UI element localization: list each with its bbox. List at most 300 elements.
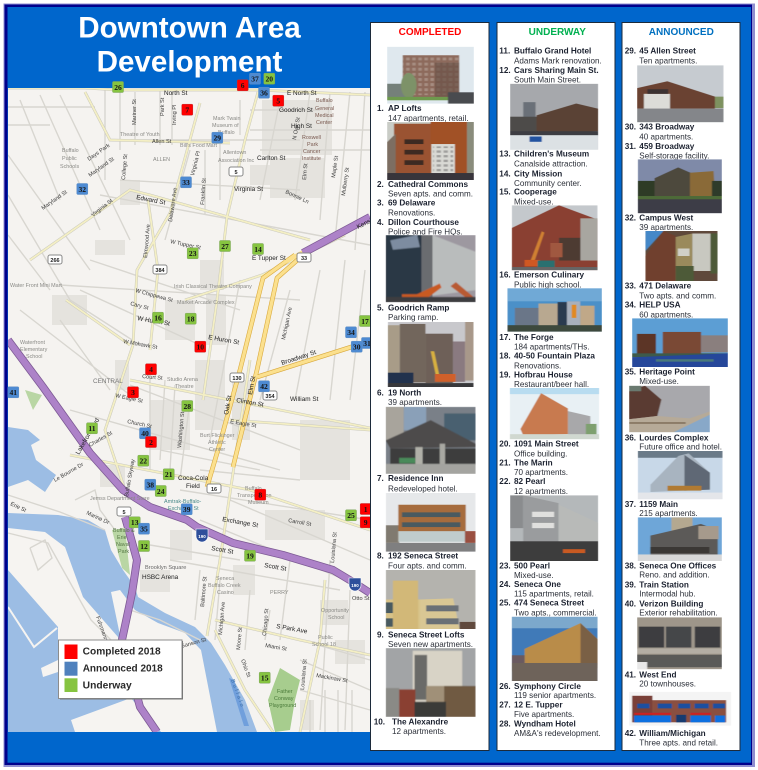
item 18: 18. [499, 352, 511, 361]
item 2 [377, 180, 473, 198]
map: street labels: Charles St [88, 430, 114, 449]
item 20: 20. [499, 440, 511, 449]
map: street labels: Cary St [129, 301, 149, 312]
photo: Heritage Point [632, 318, 728, 367]
item 30 [625, 123, 695, 142]
map: street labels: Virginia St [91, 198, 115, 219]
map: street labels: Kensington [356, 210, 388, 231]
map: street labels: Delaware Ave [168, 187, 179, 222]
map: street labels: Elementary [20, 347, 48, 353]
map: street labels: Naval [116, 542, 130, 548]
item 15 [499, 188, 557, 207]
marker group: underway [86, 73, 370, 683]
marker numbers: 18 [187, 314, 195, 324]
map: street labels: Otto St [352, 596, 370, 602]
marker numbers: 21 [165, 470, 173, 479]
item 5: Parking ramp. [388, 313, 438, 322]
item 21 [499, 458, 568, 477]
marker numbers: 8 [258, 490, 262, 500]
item 35: 35. [625, 367, 636, 376]
map: street labels: Allen St [152, 139, 172, 145]
map: street labels: CENTRAL [93, 378, 123, 385]
item 20 [499, 440, 579, 458]
photo: 19 North [388, 322, 474, 387]
item 16 [499, 270, 585, 289]
item 18: Renovations. [514, 361, 561, 370]
item 36 [625, 433, 722, 452]
item 10 [374, 717, 449, 736]
item 9: Seven new apartments. [388, 640, 473, 649]
map: street labels: Erie St [9, 501, 27, 514]
map: street labels: General [315, 106, 334, 112]
item 21: 21. [499, 458, 511, 467]
item 8 [377, 552, 467, 570]
map: street labels: Center [209, 447, 225, 453]
map: street labels: Buffalo [316, 98, 333, 104]
item 16: Public high school. [514, 280, 582, 289]
map: street labels: Park St [160, 97, 166, 116]
marker numbers: 22 [140, 456, 147, 466]
map: street labels: Water Front Mini Mart [10, 283, 62, 289]
item 25: 474 Seneca Street [514, 599, 584, 608]
map: highway shields: 5 [234, 170, 238, 176]
item 10: 12 apartments. [392, 727, 446, 736]
item 12: 12. [499, 66, 511, 75]
map: street labels: Ohio St [239, 659, 251, 679]
map: street labels: Virginia Pl [190, 151, 202, 176]
marker numbers: 39 [183, 505, 191, 514]
map: street labels: Irving Pl [172, 105, 178, 125]
item 42: William/Michigan [639, 729, 706, 738]
item 11: Buffalo Grand Hotel [514, 47, 591, 56]
map: street labels: Market Arcade Complex [177, 300, 235, 306]
photo: 500 Pearl [510, 495, 598, 561]
legend: completed: Completed 2018 [83, 646, 161, 658]
map: street labels: Marine Dr [85, 510, 110, 526]
map: street labels: W Eagle St [115, 393, 144, 405]
map: street labels: Buffalo Skyway [124, 459, 137, 497]
map: street labels: Lakefront Blvd [75, 417, 101, 456]
map: street labels: William St [290, 396, 319, 403]
photo: Residence Inn [386, 406, 476, 474]
legend: announced: Announced 2018 [83, 664, 163, 674]
map: street labels: Moore St [236, 627, 244, 650]
map: street labels: School [26, 354, 42, 360]
map: street labels: E Huron St [208, 334, 240, 346]
heading: completed: COMPLETED [399, 27, 461, 38]
item 21: 70 apartments. [514, 468, 568, 477]
item 33: 33. [625, 281, 636, 290]
item 9: 9. [377, 630, 384, 639]
item 24: 115 apartments, retail. [514, 590, 594, 599]
map: street labels: Casino [217, 590, 234, 596]
item 10: The Alexandre [392, 717, 449, 726]
item 29: 29. [625, 47, 636, 56]
item 11: Adams Mark renovation. [514, 56, 602, 65]
item 22: 82 Pearl [514, 477, 545, 486]
marker numbers: 1 [364, 505, 368, 514]
map: street labels: Fuhrmann Blvd [94, 616, 113, 653]
marker numbers: 33 [182, 178, 190, 187]
item 38: Reno. and addition. [639, 570, 710, 579]
map: street labels: W Chippewa St [134, 288, 174, 304]
item 24 [499, 580, 594, 599]
panel: underway [497, 22, 615, 750]
photo: AP Lofts [387, 46, 474, 104]
item 2: Cathedral Commons [388, 180, 469, 189]
item 35: Mixed-use. [639, 377, 679, 386]
item 37: 37. [625, 500, 636, 509]
marker numbers: 40 [141, 429, 149, 438]
item 34: 60 apartments. [639, 310, 693, 319]
map: street labels: Maryland St [88, 156, 116, 179]
map: highway shields: 190 [351, 583, 359, 588]
photo: Cathedral Commons [387, 122, 474, 180]
item 40: Verizon Building [639, 599, 703, 608]
map: street labels: Medical [315, 113, 334, 119]
map: street labels: Chicago St [262, 608, 270, 636]
map: street labels: Field [186, 483, 200, 490]
map: street labels: Scott St [211, 545, 234, 556]
photo: 474 Seneca [512, 616, 598, 681]
item 14: Community center. [514, 179, 581, 188]
map: street labels: Church St [127, 419, 153, 430]
legend: underway: Underway [83, 680, 132, 692]
map: street labels: Transportation [237, 493, 272, 499]
item 4: Police and Fire HQs. [388, 228, 463, 236]
map: street labels: Mark Twain [213, 116, 240, 122]
marker numbers: 4 [149, 365, 153, 374]
item 42 [625, 729, 718, 747]
marker numbers: 10 [197, 342, 204, 352]
item 30: 40 apartments. [639, 133, 693, 142]
marker numbers: 9 [364, 518, 368, 527]
map: street labels: Washington St [177, 411, 186, 448]
map: street labels: Buffalo [62, 148, 79, 154]
map: parks [25, 390, 300, 732]
item 23: Mixed-use. [514, 571, 554, 580]
item 31: Self-storage facility. [639, 152, 709, 161]
map: highway shields: 130 [232, 376, 242, 382]
map: street labels: Carroll St [288, 518, 312, 528]
item 8: 8. [377, 552, 384, 561]
map: street labels: Museum of [212, 123, 239, 129]
map: street labels: Elm St [302, 163, 309, 180]
map: street labels: Court St [142, 374, 163, 382]
item 39: Intermodal hub. [639, 590, 696, 599]
photo: Lourdes Complex [629, 386, 710, 432]
marker numbers: 23 [189, 249, 197, 258]
item 20: 1091 Main Street [514, 440, 579, 449]
item 41 [625, 670, 696, 689]
marker numbers: 6 [241, 81, 245, 90]
map: street labels: Buffalo [245, 486, 262, 492]
map [8, 88, 388, 732]
item 17: 17. [499, 333, 511, 342]
item 27: 27. [499, 701, 511, 710]
map: street labels: School [328, 615, 344, 621]
marker numbers: 12 [140, 542, 148, 551]
map: street labels: Amtrak-Buffalo- [164, 499, 202, 505]
item 21: The Marin [514, 458, 553, 467]
marker numbers: 24 [157, 487, 165, 496]
marker numbers: 37 [251, 74, 259, 84]
item 26: 119 senior apartments. [514, 691, 596, 700]
item 32: 32. [625, 214, 636, 223]
item 25: Two apts., commercial. [514, 608, 597, 617]
item 37 [625, 500, 698, 518]
map: street labels: Jemss Department Store [90, 496, 150, 502]
marker numbers: 14 [254, 245, 262, 254]
item 13: 13. [499, 150, 511, 159]
item 29 [625, 47, 697, 66]
item 15: 15. [499, 188, 511, 197]
item 25 [499, 599, 597, 617]
photo: 471 Delaware [645, 231, 718, 281]
item 38 [625, 561, 717, 579]
map: street labels: Public [62, 156, 77, 162]
map: street labels: Mariner St [132, 99, 138, 125]
item 19 [499, 370, 589, 389]
map: street labels: Coca-Cola [178, 475, 209, 482]
item 29: 45 Allen Street [639, 47, 696, 56]
map: street labels: Michigan Ave [218, 602, 227, 635]
map: street labels: Public [318, 635, 333, 641]
map: water [8, 427, 257, 732]
map: street labels: Association Inc [218, 158, 255, 164]
item 13: Canalside attraction. [514, 160, 588, 169]
item 14: 14. [499, 169, 511, 178]
item 25: 25. [499, 599, 511, 608]
item 33 [625, 281, 716, 301]
marker numbers: 36 [260, 88, 268, 98]
marker numbers: 27 [221, 242, 229, 251]
map: highway shields: 354 [265, 394, 276, 400]
photo: Goodrich Ramp [386, 235, 476, 302]
marker numbers: 19 [246, 552, 254, 560]
item 31 [625, 142, 709, 161]
photo: William/Michigan [630, 692, 731, 726]
heading: announced: ANNOUNCED [649, 27, 714, 38]
map: street labels: Bonnie Ln [284, 189, 310, 205]
photo: Campus West [638, 159, 722, 214]
marker numbers: 26 [114, 83, 122, 92]
map: street labels: Waterfront [20, 340, 45, 346]
item 3: Renovations. [388, 208, 435, 218]
map: street labels: Miami St [265, 643, 288, 653]
item 1: 147 apartments, retail. [388, 114, 469, 123]
marker numbers [10, 74, 371, 682]
map: street labels: E North St [287, 90, 317, 97]
item 4: 4. [377, 218, 384, 227]
marker numbers: 11 [88, 424, 96, 433]
item 38: 38. [625, 561, 636, 570]
marker numbers: 30 [353, 342, 361, 352]
item 41: 41. [625, 670, 636, 679]
marker group: completed [128, 80, 371, 528]
marker numbers: 5 [276, 96, 280, 106]
item 23: 500 Pearl [514, 561, 550, 570]
marker numbers: 3 [131, 388, 135, 397]
item 3: 69 Delaware [388, 198, 436, 208]
map: street labels: Seneca [216, 576, 234, 582]
map: street labels: Roswell [302, 135, 321, 141]
map: street labels: Brooklyn Square [145, 565, 186, 571]
map: street labels: Schools [60, 164, 79, 170]
map: highway shields: 190 [198, 534, 206, 539]
map: street labels: Elmwood Ave [143, 224, 152, 258]
map: street labels: Buffalo [229, 679, 245, 710]
map: highway shields: 33 [301, 256, 307, 262]
item 18 [499, 352, 595, 370]
marker numbers: 31 [363, 339, 371, 348]
map: street labels: E Tupper St [252, 255, 286, 262]
map: street labels [9, 90, 388, 710]
item 26: 26. [499, 682, 511, 691]
map: street labels: Buffalo & [113, 528, 135, 534]
item 10: 10. [374, 717, 385, 726]
item 1 [377, 104, 469, 123]
photo: West End [637, 617, 722, 670]
item 27: Five apartments. [514, 710, 574, 719]
item 18: 40-50 Fountain Plaza [514, 352, 595, 361]
marker numbers: 35 [140, 524, 148, 534]
map: street labels: Buffalo [218, 130, 235, 136]
item 15: Mixed-use. [514, 198, 554, 207]
item 14 [499, 169, 581, 188]
item 36: 36. [625, 433, 636, 442]
marker group: announced [8, 73, 373, 534]
marker numbers: 28 [184, 402, 191, 411]
item 40: 40. [625, 599, 636, 608]
map: street labels: Exchange St [168, 506, 199, 512]
item 36: Future office and hotel. [639, 443, 722, 452]
map: street labels: Park [118, 549, 129, 555]
map: street labels: Exchange St [222, 516, 259, 529]
heading: underway: UNDERWAY [529, 27, 586, 38]
item 28 [499, 719, 601, 738]
item 6: 39 apartments. [388, 398, 442, 407]
map: street labels: Maryland St [41, 189, 69, 212]
item 4 [377, 218, 463, 236]
photo: Cooperage [512, 205, 598, 270]
item 6: 6. [377, 388, 384, 398]
item 33: Two apts. and comm. [639, 292, 716, 301]
marker numbers: 34 [347, 328, 355, 337]
map: street labels: PERRY [270, 590, 289, 596]
item 37: 1159 Main [639, 500, 678, 509]
photo: 1159 Main [638, 451, 723, 500]
item 34: HELP USA [639, 301, 681, 310]
item 34 [625, 301, 693, 319]
item 22: 22. [499, 477, 511, 486]
map: street labels: E Eagle St [230, 419, 257, 430]
map: street labels: North St [164, 90, 188, 97]
item 24: 24. [499, 580, 511, 589]
marker numbers: 13 [131, 518, 139, 527]
item 12: South Main Street. [514, 76, 581, 85]
item 30: 30. [625, 123, 636, 132]
map: street labels: W Tupper St [170, 239, 202, 252]
item 28: 28. [499, 719, 511, 728]
map: street labels: Baltimore St [200, 576, 209, 607]
marker numbers: 41 [10, 388, 17, 397]
map: street labels: Studio Arena [167, 377, 198, 383]
map: street labels: Oak St [223, 395, 233, 415]
item 38: Seneca One Offices [639, 561, 717, 570]
item 1: 1. [377, 104, 384, 113]
item 4: Dillon Courthouse [388, 218, 459, 227]
item 34: 34. [625, 301, 636, 310]
marker numbers: 29 [214, 134, 221, 142]
photo: 1091 Main [510, 388, 600, 440]
item 40 [625, 599, 718, 618]
item 31: 31. [625, 142, 636, 151]
item 7: 7. [377, 474, 384, 483]
map: highway shields [48, 167, 361, 591]
marker numbers: 20 [266, 74, 273, 84]
item 8: 192 Seneca Street [388, 552, 458, 561]
item 2: 2. [377, 180, 384, 189]
item 3 [377, 198, 436, 218]
item 5: Goodrich Ramp [388, 304, 449, 312]
item 19: 19. [499, 370, 511, 379]
item 17: The Forge [514, 333, 554, 342]
item 19: Restaurant/beer hall. [514, 380, 589, 389]
item 36: Lourdes Complex [639, 433, 709, 442]
map: street labels: Days Park [87, 143, 111, 163]
marker numbers: 25 [347, 511, 355, 520]
item 2: Seven apts. and comm. [388, 190, 473, 198]
map: expressways [8, 217, 370, 732]
map: street labels: Scott St [264, 562, 287, 573]
map: arterial roads [8, 88, 370, 732]
item 37: 215 apartments. [639, 509, 698, 518]
item 15: Cooperage [514, 188, 557, 197]
item 5 [377, 304, 449, 322]
map: street labels: High St [291, 123, 312, 130]
marker numbers: 38 [147, 480, 154, 490]
map legend [58, 640, 182, 699]
item 12 [499, 66, 599, 85]
map: street labels: W Mohawk St [123, 339, 158, 351]
item 23: 23. [499, 561, 511, 570]
photo: 192 Seneca [386, 493, 476, 552]
item 32: Campus West [639, 214, 694, 223]
item 31: 459 Broadway [639, 142, 695, 151]
map: street labels: Allentown [223, 150, 246, 156]
map: highway shields: 16 [211, 487, 217, 493]
marker numbers: 17 [361, 317, 369, 326]
photo: 45 Allen [637, 65, 724, 122]
item 17 [499, 333, 590, 352]
photo: The Forge [507, 288, 602, 332]
item 13 [499, 150, 589, 169]
item 29: Ten apartments. [639, 57, 697, 66]
map: street labels: Playground [269, 703, 296, 709]
map: street labels: Mackinaw St [316, 673, 348, 685]
title: Development [97, 46, 283, 78]
map: street labels: Buffalo Creek [208, 583, 241, 589]
map: street labels: Clinton St [236, 397, 264, 409]
item 35 [625, 367, 695, 386]
item 33: 471 Delaware [639, 281, 692, 290]
item 26 [499, 682, 596, 700]
map: street labels: N Oak St [292, 117, 302, 140]
map: street labels: Erie [117, 535, 127, 541]
item 41: 20 townhouses. [639, 680, 696, 689]
map: street labels: Cancer [303, 149, 321, 155]
